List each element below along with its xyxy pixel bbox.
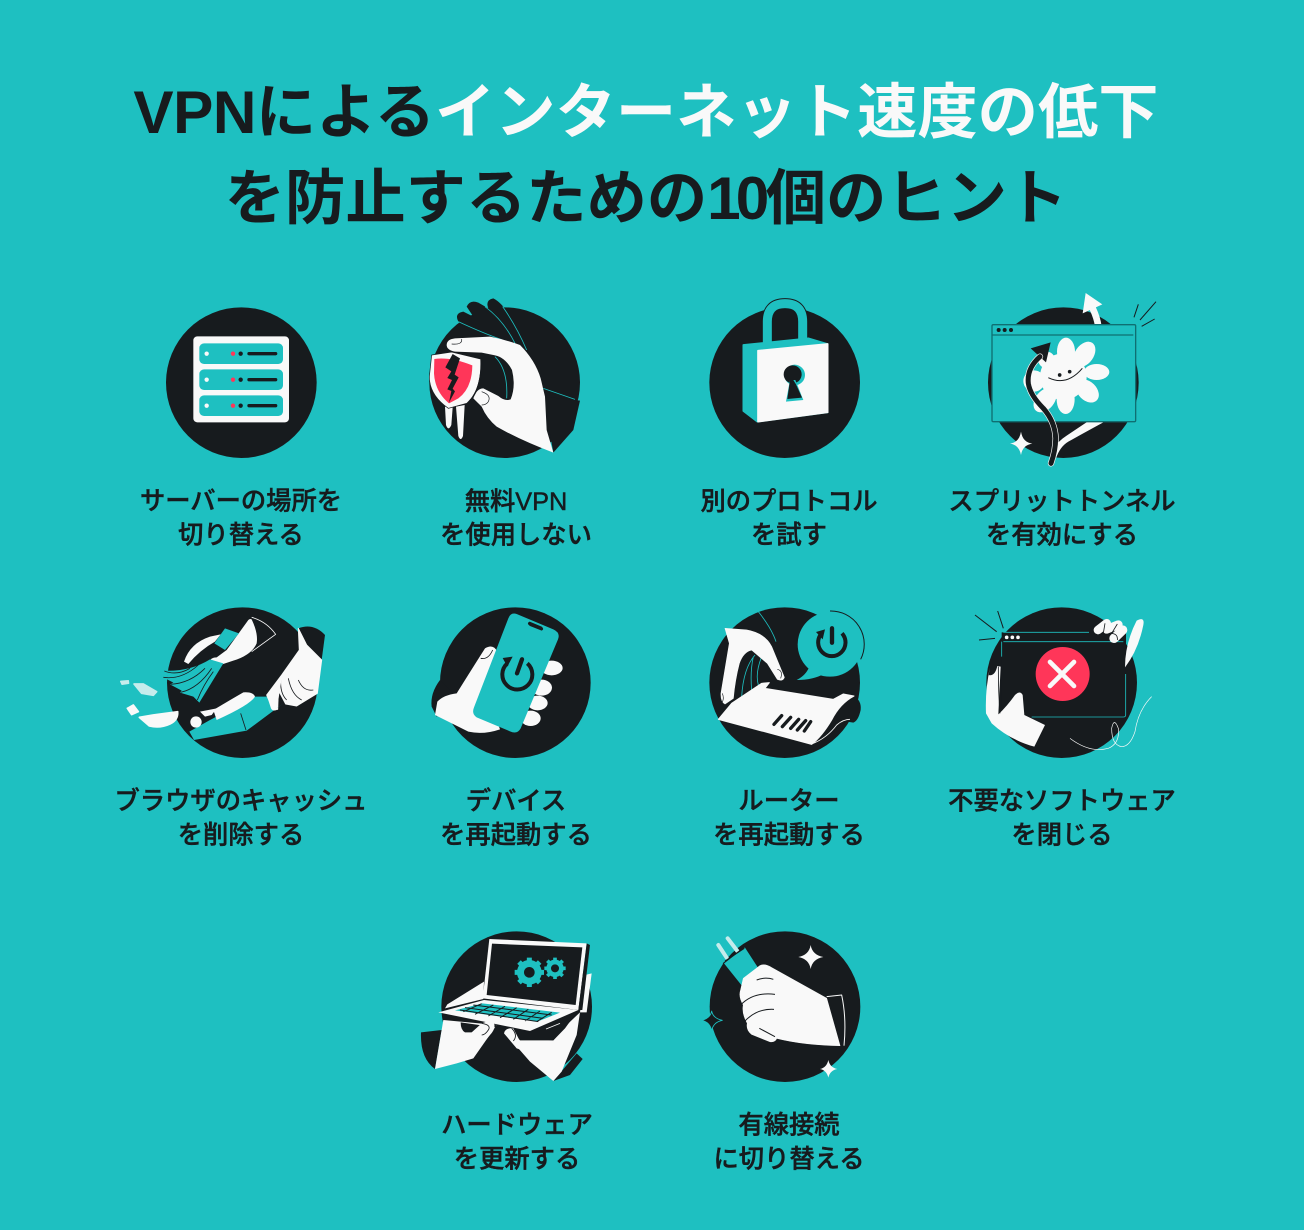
icon: hands wiping browser cache — [121, 607, 325, 758]
label: を更新する — [454, 1146, 580, 1174]
label: サーバーの場所を — [140, 488, 342, 516]
panel: switch server location — [140, 307, 342, 550]
label: ルーター — [738, 788, 840, 816]
panel: restart device — [431, 607, 592, 850]
label: に切り替える — [713, 1146, 865, 1174]
icon: browser window with flower and arrows — [988, 293, 1156, 463]
panel: switch to wired connection — [702, 931, 865, 1174]
panel: clear browser cache — [115, 607, 367, 850]
title: を防止するための10個のヒント — [225, 164, 1067, 232]
label: を再起動する — [713, 822, 865, 850]
panel: update hardware — [421, 931, 593, 1174]
label: を有効にする — [986, 522, 1138, 550]
panel: try a different protocol — [700, 304, 878, 550]
panel: close unnecessary software — [948, 607, 1176, 850]
label: 切り替える — [178, 522, 304, 550]
title: VPNによるインターネット速度の低下 — [133, 78, 1159, 146]
panel: restart router — [709, 607, 865, 850]
label: を使用しない — [440, 522, 592, 550]
label: を試す — [751, 522, 827, 550]
icon: hand holding broken shield — [429, 298, 580, 458]
label: ハードウェア — [441, 1112, 593, 1140]
icon: server rack — [166, 307, 317, 458]
label: 別のプロトコル — [700, 488, 878, 516]
icon: hand holding plug with sparkles — [702, 931, 860, 1082]
label: 不要なソフトウェア — [948, 788, 1176, 816]
icon: hands holding laptop with gears — [421, 931, 592, 1082]
title — [133, 78, 1159, 232]
icon: padlock — [709, 304, 860, 458]
label: を再起動する — [440, 822, 592, 850]
panel: enable split tunneling — [948, 293, 1176, 550]
label: を削除する — [178, 822, 304, 850]
label: ブラウザのキャッシュ — [115, 786, 367, 816]
label: を閉じる — [1011, 822, 1113, 850]
label: 無料VPN — [465, 488, 567, 516]
label: スプリットトンネル — [948, 488, 1176, 516]
label: 有線接続 — [738, 1112, 840, 1140]
panel: do not use free VPN — [429, 298, 592, 550]
icon: hand holding phone with power symbol — [431, 607, 591, 758]
icon: hand on router with power bubble — [709, 607, 864, 758]
label: デバイス — [466, 786, 566, 816]
icon: hands holding error window — [975, 607, 1152, 758]
